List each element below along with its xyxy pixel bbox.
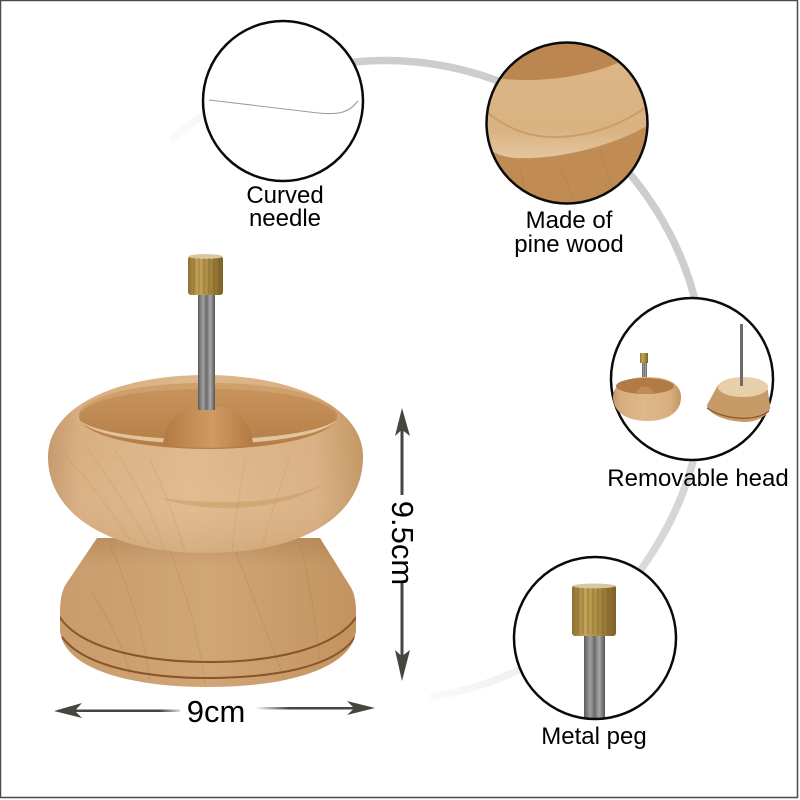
callout: pine wood [485,41,649,257]
brass cap [188,254,223,295]
pine wood label: Made of [526,207,612,234]
removable head label: Removable head [607,465,789,492]
height dimension arrow: 9.5cm [385,501,420,585]
callout: curved needle [203,21,363,232]
miniature base [707,324,770,422]
knob [163,407,253,448]
removable head circle [611,298,773,460]
callout: removable head [607,298,789,492]
width dimension arrow [54,694,375,729]
callout: metal peg [514,557,676,750]
miniature bowl [613,353,681,421]
width dimension arrow: 9cm [187,694,245,729]
curved needle label: needle [249,205,321,232]
curved needle circle [203,21,363,181]
base [60,538,356,687]
pine wood label: pine wood [514,231,624,258]
height dimension arrow [385,408,420,681]
bowl [45,375,365,555]
spool product photo [45,254,370,690]
metal peg circle [514,557,676,721]
connecting arc [170,60,698,697]
pine wood circle [485,41,649,205]
shaft [198,295,215,410]
bowl interior [79,383,337,449]
metal peg label: Metal peg [541,723,647,750]
curved needle label: Curved [246,182,324,209]
